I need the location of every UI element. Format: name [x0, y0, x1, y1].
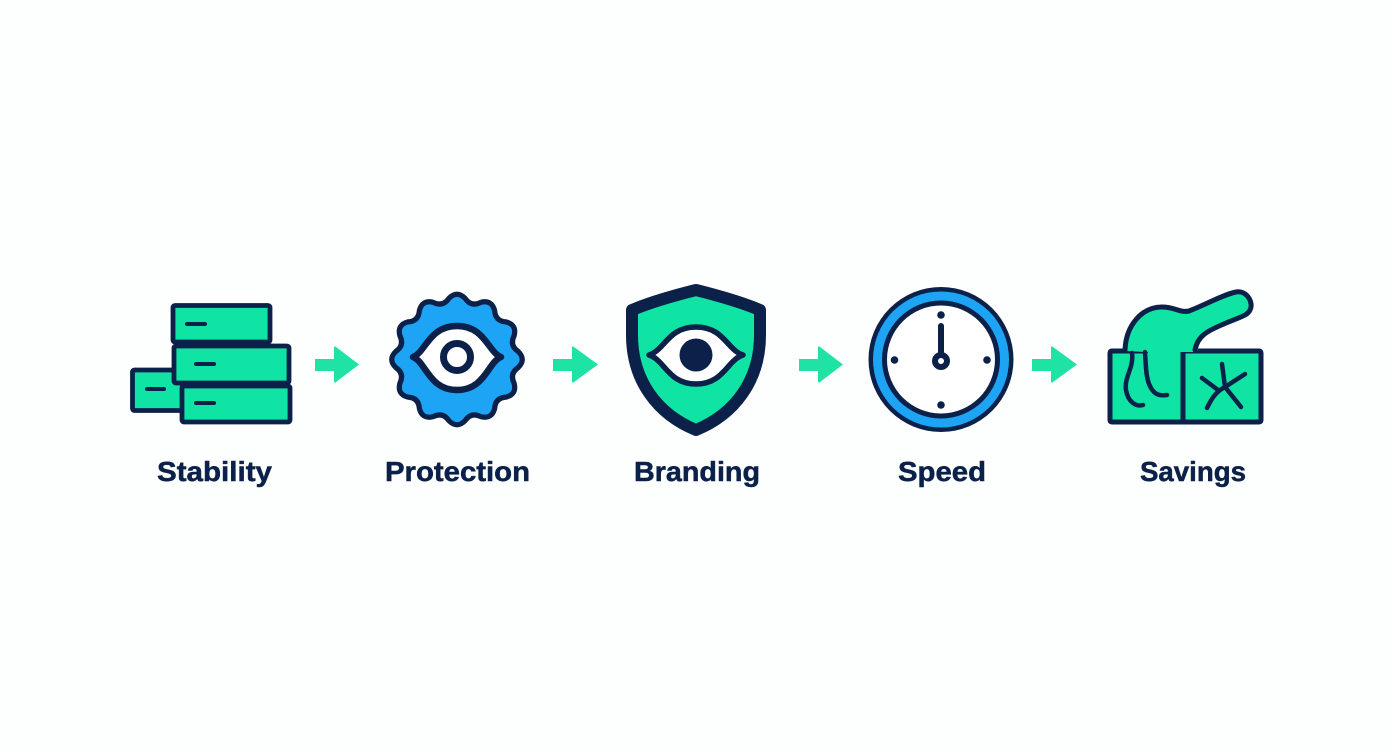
label: Stability: Stability	[157, 456, 272, 487]
label: Protection: Protection	[385, 456, 530, 487]
icon: blue gear with eye	[392, 294, 522, 425]
label: Branding: Branding	[634, 456, 760, 487]
arrow: protection to branding	[553, 346, 598, 383]
label: Speed: Speed	[898, 456, 986, 487]
icon: clock	[868, 287, 1014, 432]
icon: savings boxes with green shape	[1110, 292, 1261, 422]
arrow: branding to speed	[799, 346, 843, 383]
arrow: speed to savings	[1032, 346, 1077, 383]
icon: stacked server boxes	[132, 306, 290, 422]
label: Savings: Savings	[1140, 456, 1246, 487]
arrow: stability to protection	[315, 346, 359, 383]
icon: green shield with eye	[632, 290, 760, 430]
